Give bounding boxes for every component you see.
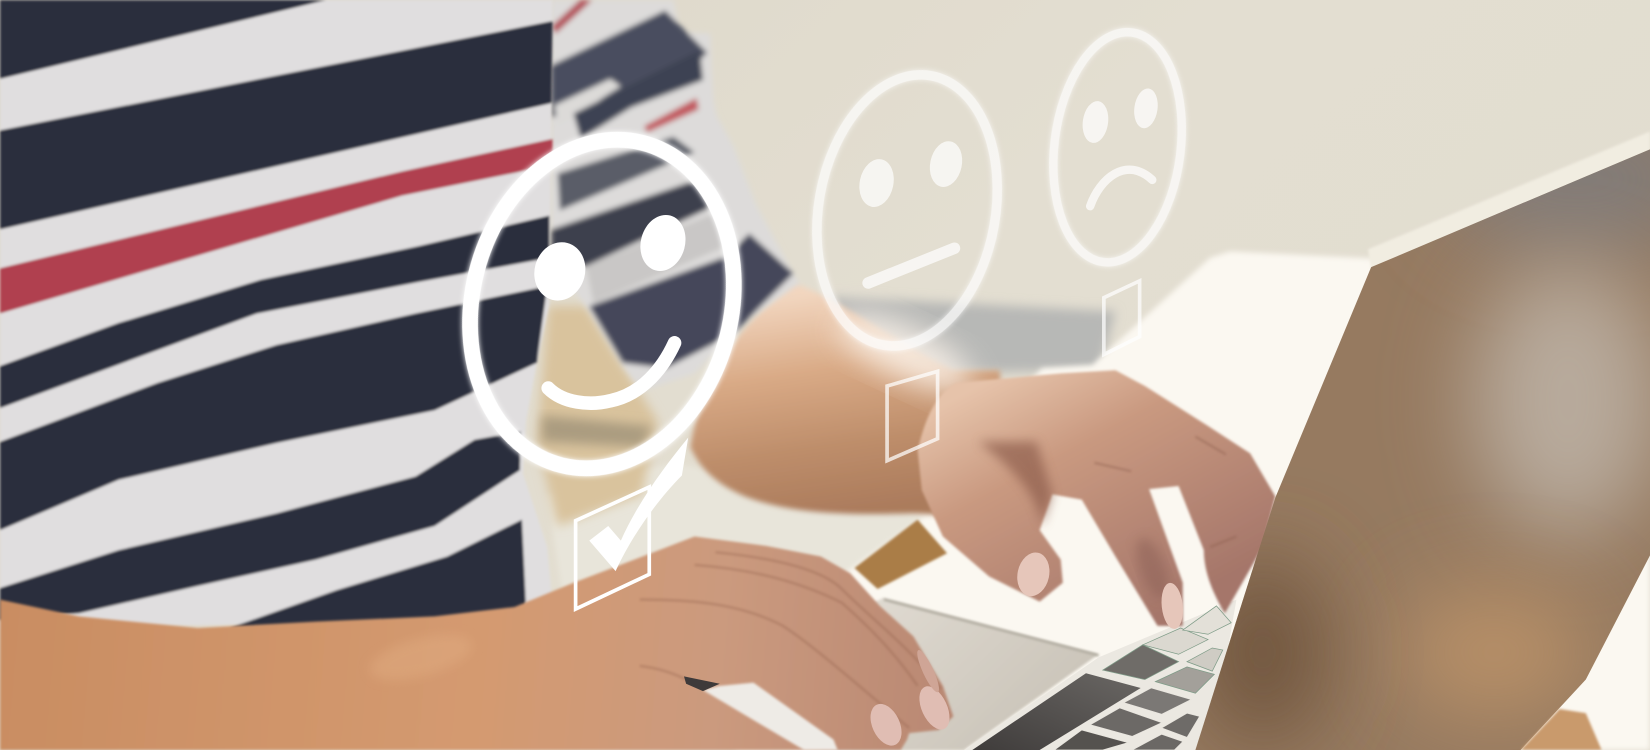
fingertip shadow bbox=[1130, 534, 1175, 602]
wrist highlight bbox=[365, 626, 477, 689]
happy face ring bbox=[436, 111, 768, 497]
sleeve bbox=[551, 0, 800, 391]
neutral face ring bbox=[796, 60, 1018, 360]
fingernails bbox=[864, 648, 956, 750]
white gap between fingers bbox=[703, 683, 838, 750]
right forearm bbox=[690, 283, 1010, 515]
laptop lid bbox=[1189, 105, 1650, 750]
elbow behind laptop bbox=[1521, 709, 1602, 750]
finger shadow bbox=[979, 442, 1052, 526]
neutral eyes bbox=[855, 138, 966, 210]
lower forearm and hand on trackpad bbox=[0, 536, 956, 750]
hand on keyboard bbox=[918, 370, 1275, 630]
sad mouth bbox=[1090, 170, 1152, 206]
sad eyes bbox=[1080, 87, 1160, 145]
keyboard keys bbox=[1054, 606, 1231, 750]
sad box bbox=[1104, 281, 1140, 354]
check box bbox=[576, 487, 649, 609]
keyboard hand nails bbox=[1013, 549, 1185, 630]
emoji: happy face with check box bbox=[436, 111, 768, 609]
space bar bbox=[972, 673, 1141, 750]
trackpad edge bbox=[884, 600, 1099, 655]
smile eyes bbox=[528, 210, 692, 306]
sad face ring bbox=[1041, 25, 1194, 270]
smile mouth bbox=[548, 343, 675, 403]
neutral mouth bbox=[868, 248, 954, 283]
background dark band bbox=[831, 297, 1115, 374]
striped shirt body bbox=[0, 0, 552, 628]
forearm highlight bbox=[828, 298, 982, 406]
laptop base and trackpad bbox=[700, 597, 1236, 750]
knuckle lines bbox=[1094, 437, 1236, 547]
check mark bbox=[589, 438, 688, 571]
wedding ring bbox=[684, 676, 720, 691]
finger creases bbox=[640, 552, 941, 728]
wooden chair edge bbox=[854, 520, 947, 589]
neutral box bbox=[887, 371, 938, 461]
emoji: neutral face with box bbox=[796, 60, 1018, 461]
emoji: sad face with box bbox=[1041, 25, 1194, 354]
white table and laptop base bbox=[537, 251, 1650, 750]
